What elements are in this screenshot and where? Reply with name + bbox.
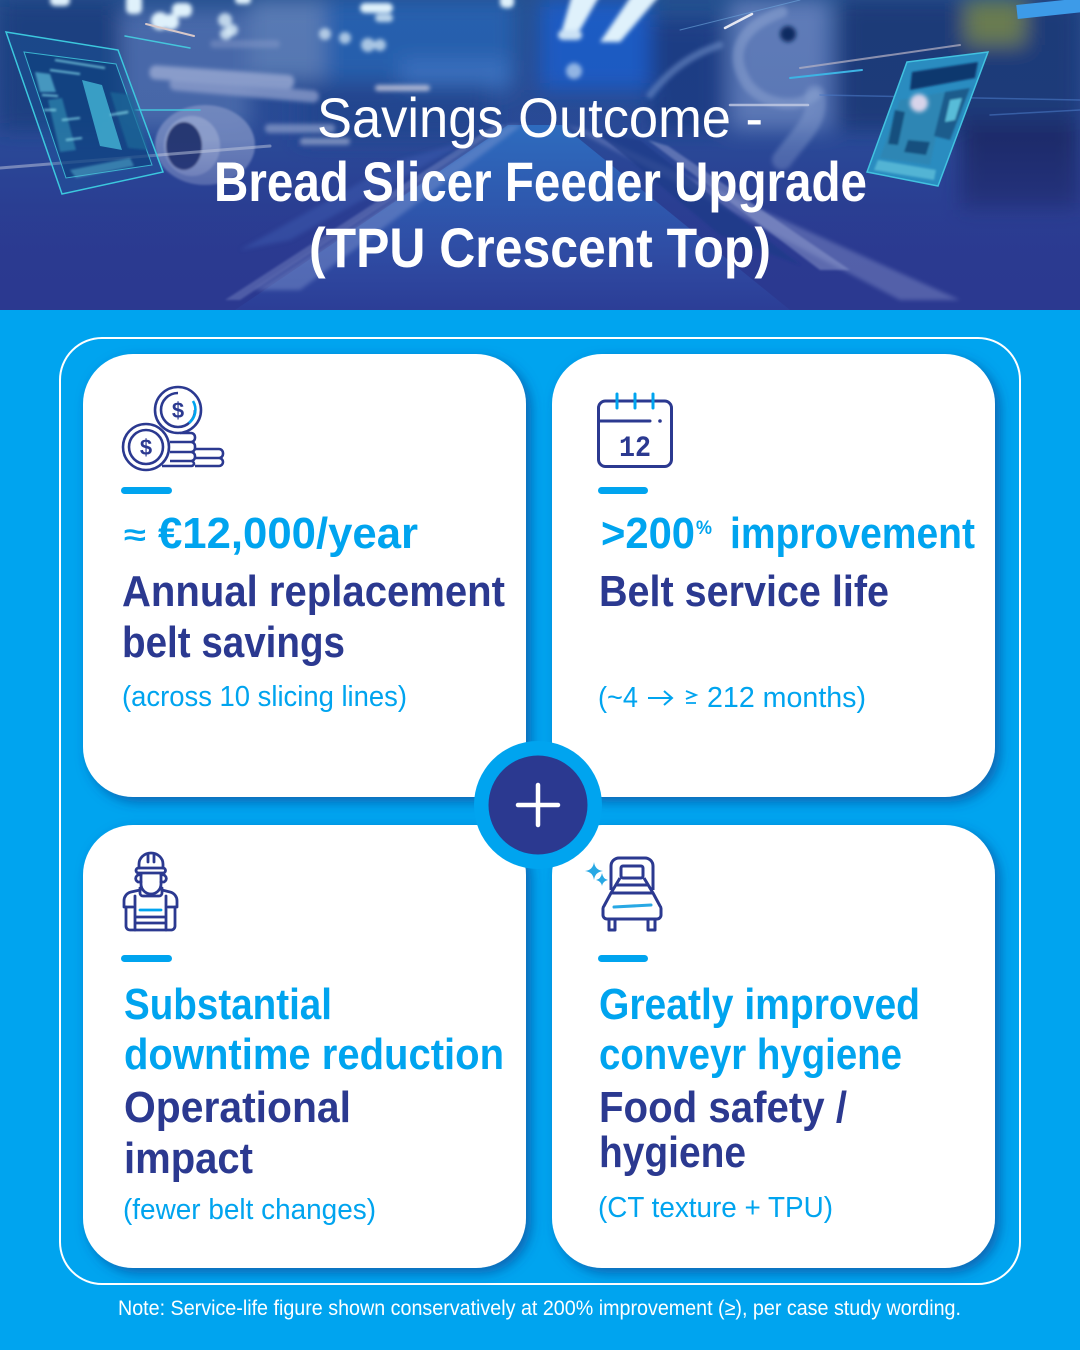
stat: improvement: % [696,518,712,539]
motion light streaks [0,0,1080,168]
accent bar [121,487,172,494]
fade to navy [156,131,1079,212]
note: fewer belt changes: (fewer belt changes) [123,1194,376,1226]
stat: improvement: >200 [601,509,695,558]
stat: substantial downtime reduction: Substantial [124,980,332,1029]
outer frame [60,338,1020,1284]
stat: improvement: improvement [730,509,975,558]
robot arm [650,12,816,160]
title: Bread Slicer Feeder Upgrade [214,150,867,213]
heading: food safety hygiene: Food safety / [599,1083,847,1132]
panel: belt savings [83,354,526,797]
icon: worker [124,853,177,930]
machine wheel [155,105,255,185]
panel: conveyor hygiene [552,825,995,1268]
note: months: 212 months) [707,682,866,714]
title: (TPU Crescent Top) [309,216,771,279]
holographic panel right [867,52,988,186]
icon: plus badge [474,741,602,869]
heading: operational impact: Operational [124,1083,351,1132]
stat: greatly improved conveyor hygiene: conveyr hygiene [599,1030,902,1079]
stat: substantial downtime reduction: downtime reduction [124,1030,504,1079]
note: CT texture + TPU: (CT texture + TPU) [598,1192,833,1224]
icon: clean conveyor [585,858,661,930]
heading: belt service life: Belt service life [599,567,889,616]
icon: calendar [598,394,672,466]
heading: annual replacement belt savings: Annual replacement [122,567,505,616]
stat: greatly improved conveyor hygiene [599,980,920,1079]
title [214,86,867,279]
heading: annual replacement belt savings: belt savings [122,618,345,667]
stat: greatly improved conveyor hygiene: Greatly improved [599,980,920,1029]
panel: downtime reduction [83,825,526,1268]
stat: amount per year: €12,000/year [158,509,418,558]
stat: amount per year: ≈ [124,519,146,552]
heading: food safety hygiene [599,1083,847,1177]
panel: belt service life [552,354,995,797]
icon: coins: $ [140,435,152,460]
icon: calendar: 12 [619,432,651,466]
machine bars left [149,40,430,145]
note: across slicing lines: (across 10 slicing lines) [122,681,407,713]
heading: annual replacement belt savings [122,567,505,667]
bokeh factory lights [50,0,660,79]
note: months [598,682,866,714]
accent bar [598,955,648,962]
header photo: factory conveyor line [0,0,1080,310]
stat: substantial downtime reduction [124,980,504,1079]
heading: operational impact: impact [124,1134,253,1183]
icon: coins: $ [172,398,184,423]
footnote: Note: Service-life figure shown conservatively at 200% improvement (≥), per case study wording. [118,1297,961,1320]
icon: coins [123,387,223,470]
holographic panel left [6,32,163,194]
title: Savings Outcome - [317,86,763,149]
conveyor belt [225,125,960,310]
heading: operational impact [124,1083,351,1183]
accent bar [598,487,648,494]
heading: food safety hygiene: hygiene [599,1128,746,1177]
accent bar [121,955,172,962]
stat: improvement [601,509,975,558]
note: months: (~4 [598,682,638,714]
